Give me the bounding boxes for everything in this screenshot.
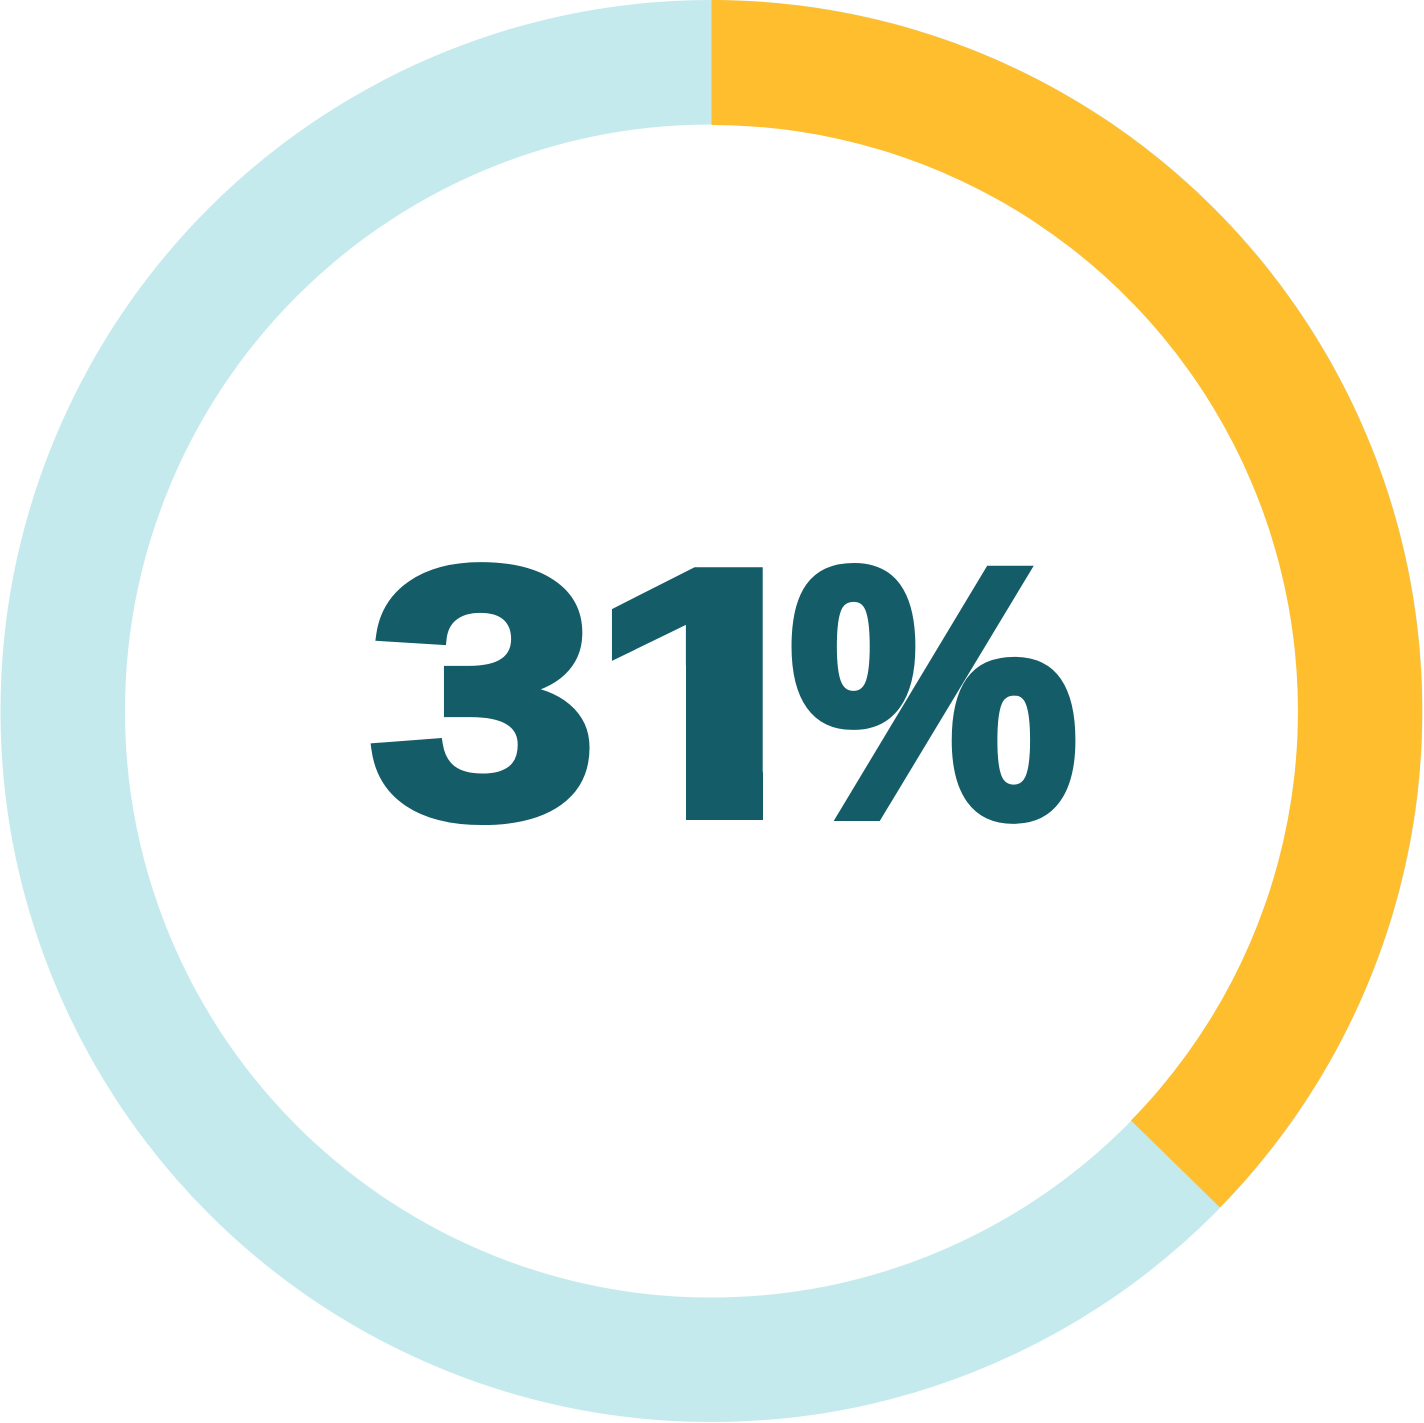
- percentage value: 1: [589, 498, 838, 889]
- percentage value: %: [789, 496, 1078, 891]
- percentage value: [370, 562, 1076, 825]
- percentage value: 3: [369, 496, 597, 891]
- ring highlighted segment: [712, 0, 1422, 1208]
